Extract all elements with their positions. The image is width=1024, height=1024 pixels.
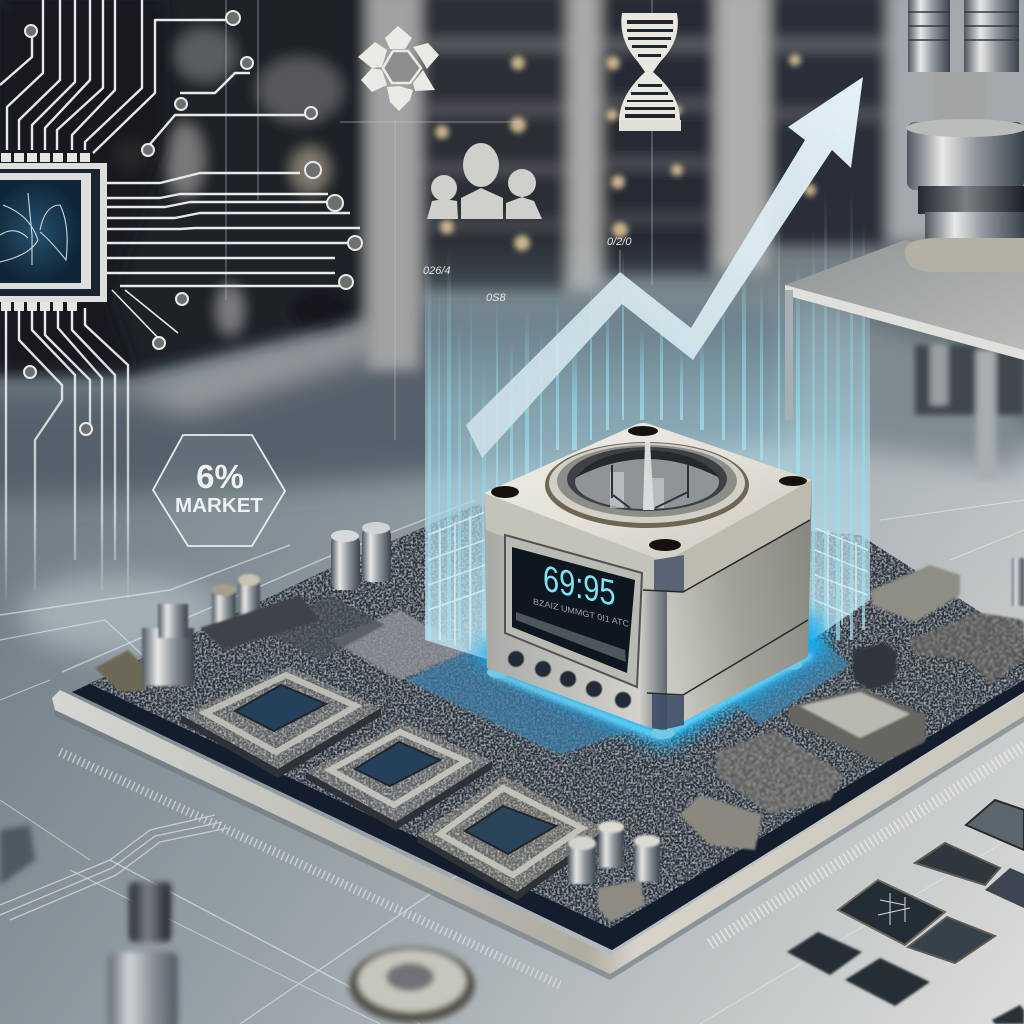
label: third data point: 0/2/0	[607, 236, 632, 248]
badge hexagon	[153, 435, 285, 546]
machine column	[905, 0, 1024, 272]
holographic grid left of device	[428, 512, 485, 650]
chip anatomy sketch	[0, 193, 67, 265]
right components	[568, 558, 1024, 922]
component: pillar far right	[1012, 558, 1024, 606]
thin guide lines	[226, 0, 652, 440]
chip: bottom corner	[992, 1005, 1024, 1024]
board texture	[260, 595, 850, 755]
device buttons	[508, 651, 631, 708]
etched chip markings	[878, 893, 910, 925]
floor tick-mark strips	[0, 746, 1024, 985]
ring disk	[349, 947, 475, 1023]
central processor chip	[0, 153, 107, 311]
component: dark cube	[853, 643, 897, 690]
icon: DNA helix	[619, 13, 681, 131]
blue glow under device	[470, 610, 830, 748]
chip 3	[417, 776, 606, 900]
growth arrow	[466, 77, 863, 458]
device top face	[484, 423, 812, 560]
chip: companion	[908, 917, 995, 963]
foreground components	[0, 825, 475, 1024]
chip: blurred left	[787, 932, 862, 975]
traces: bottom bus	[6, 308, 128, 600]
badge: 6% market	[153, 435, 285, 546]
board shadowed rim	[72, 680, 1024, 950]
component: silver capacitor pack	[788, 688, 926, 763]
badge label: MARKET	[175, 495, 263, 517]
floor grid lines	[0, 500, 1024, 1024]
white cylinder	[108, 952, 178, 1024]
label: second data point: 0S8	[486, 292, 506, 304]
dark backing behind top-left circuitry	[0, 0, 165, 370]
bright glow edge	[490, 655, 812, 737]
chip 1	[181, 667, 381, 778]
display screen	[512, 547, 635, 673]
lab machine on table	[785, 0, 1024, 480]
lower corner	[652, 694, 684, 730]
top ring	[545, 442, 749, 528]
holographic column behind device	[425, 190, 870, 660]
chip: upper row	[915, 843, 1000, 885]
circuit traces	[0, 0, 362, 600]
left edge part	[0, 825, 35, 885]
display reading: 69:95	[543, 558, 616, 615]
precision device	[484, 423, 812, 739]
chart labels	[423, 236, 632, 304]
label: first data point: 026/4	[423, 265, 451, 277]
component: heat sink	[716, 730, 845, 815]
icon: flower hexagon	[358, 26, 439, 111]
component: power block	[910, 612, 1024, 684]
board glass edge	[62, 500, 475, 672]
seam lines	[643, 520, 810, 695]
table top	[785, 240, 1024, 356]
top plate left band	[484, 493, 667, 592]
board surface	[72, 505, 1024, 950]
device left face	[484, 493, 667, 730]
lower right chips	[787, 800, 1024, 1024]
dark cylinder	[129, 882, 171, 942]
badge value: 6%	[196, 458, 244, 495]
top plate right band	[667, 480, 812, 592]
traces: top bus	[0, 0, 305, 153]
background: blurred server racks	[0, 0, 1024, 655]
chip: large etched	[838, 880, 945, 945]
display bezel	[505, 535, 642, 687]
holographic grid right of device	[815, 528, 868, 632]
chip: blurred bottom	[845, 958, 930, 1006]
chip 2	[306, 722, 492, 830]
display caption: BZAIZ UMMGT 0I1 ATC	[533, 596, 629, 629]
mounting screws	[491, 426, 807, 551]
table legs	[915, 345, 1024, 480]
front corner	[654, 555, 684, 592]
chip: right edge	[985, 868, 1024, 908]
trace end nodes	[24, 11, 362, 435]
traces: right bus	[107, 173, 360, 345]
icon: group of people	[427, 143, 542, 219]
component: module top right	[872, 565, 960, 622]
circuit board plate	[52, 505, 1024, 980]
chip pads	[1, 153, 90, 311]
chip: top right	[966, 800, 1024, 850]
left components cluster	[95, 574, 320, 692]
device feet	[487, 660, 802, 739]
display lower band	[516, 612, 626, 662]
component: small block	[680, 795, 762, 850]
capacitors	[331, 522, 391, 590]
device right face	[667, 480, 812, 730]
component: capacitor group	[568, 821, 660, 922]
